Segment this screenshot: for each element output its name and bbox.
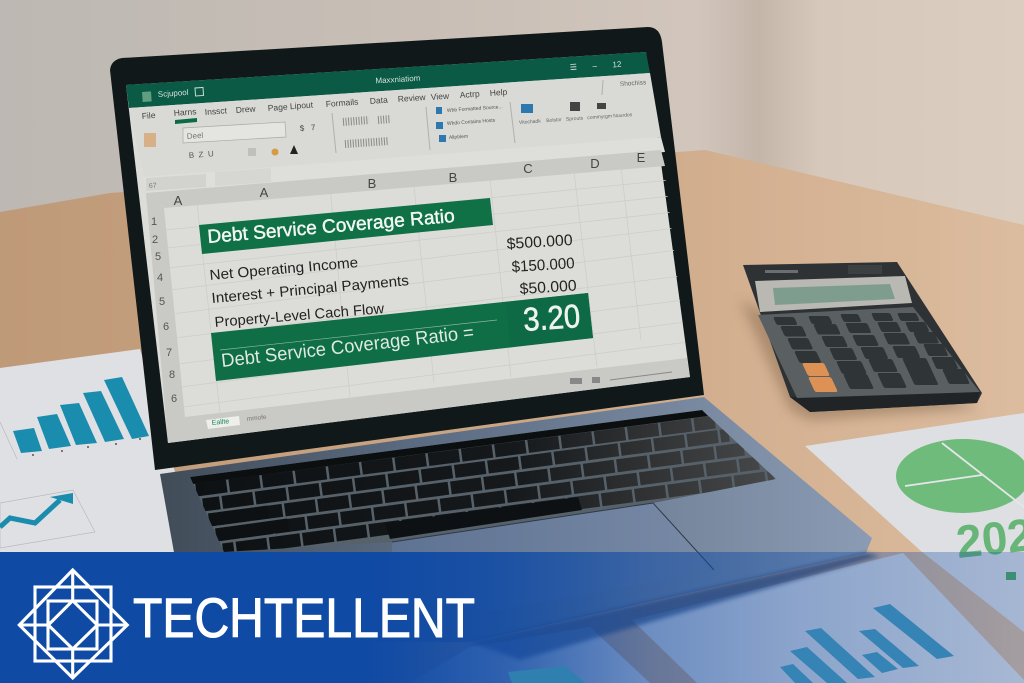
paper: bar chart report on the left: [0, 349, 200, 560]
top strip and solar panel: [765, 265, 882, 274]
result value: 3.20: [522, 297, 581, 338]
ribbon tabs: View: [430, 91, 450, 102]
long modifier keys: [209, 512, 288, 535]
row numbers: [151, 216, 177, 405]
sheet tabs: mmofe: [246, 414, 267, 423]
result value cell: [506, 293, 593, 347]
trend arrow chart: [0, 490, 95, 548]
ribbon style labels: Wbdo Contains Hosts: [447, 118, 496, 127]
column headers band: B: [368, 176, 376, 191]
column headers band: C: [523, 161, 533, 176]
ribbon tabs: Harns: [173, 106, 197, 118]
logo icon: [19, 570, 127, 678]
row labels: Net Operating Income: [209, 255, 359, 284]
row values: $150.000: [511, 255, 575, 276]
paper: small report under banner: [410, 627, 650, 683]
paper: pie chart report on the right: [805, 413, 1024, 632]
column headers band: E: [637, 150, 646, 165]
row labels: [209, 255, 410, 331]
desk shadow under laptop: [470, 553, 880, 660]
bar chart: [13, 377, 149, 453]
space bar: [385, 497, 582, 539]
laptop: [110, 27, 880, 660]
row numbers: 6: [171, 393, 177, 405]
ribbon tabs: Actrp: [459, 88, 480, 100]
font style buttons: B Z U: [189, 149, 214, 160]
formula bar: [144, 137, 665, 193]
ribbon tabs: Help: [489, 87, 508, 98]
active tab underline: [175, 118, 197, 124]
front lip: [790, 391, 980, 412]
share button: Shochiss: [620, 79, 647, 88]
trackpad edge: [392, 503, 714, 570]
row numbers: 6: [163, 321, 169, 333]
font name: Deel: [187, 131, 204, 141]
ribbon: [129, 73, 661, 177]
calculator: [740, 262, 982, 420]
formula buttons: [215, 168, 271, 186]
body: [743, 262, 982, 412]
banner overlay: [0, 552, 1024, 683]
ribbon tabs: Formails: [325, 97, 359, 109]
display: [773, 284, 895, 305]
row numbers: 5: [155, 251, 161, 263]
alignment lines: [343, 119, 391, 144]
fill colour icon: [272, 148, 278, 156]
row values: [506, 232, 578, 298]
save icon: [142, 91, 152, 102]
small legend square: [1006, 572, 1016, 580]
column headers band: A: [260, 185, 269, 200]
column headers band: D: [590, 156, 600, 171]
document title: Maxxniatiom: [375, 74, 421, 85]
ribbon right labels: Vitochadk Bolstor Sprouts commyrgm Nuurdos: [519, 112, 633, 126]
sheet tabs: Eallte: [211, 418, 230, 427]
window controls: ☰ – 12: [570, 60, 622, 72]
ribbon dark icons: [570, 102, 606, 111]
row values: $500.000: [506, 232, 574, 253]
ribbon tabs: File: [141, 110, 156, 121]
ribbon style labels: [447, 104, 503, 141]
row numbers: 2: [152, 234, 158, 246]
status bar controls: [570, 372, 672, 384]
display surround: [755, 276, 912, 312]
number format: $ 7: [300, 123, 316, 133]
screen: [126, 52, 690, 443]
ribbon dividers: [332, 80, 603, 153]
title bar: [126, 52, 650, 108]
row labels: Interest + Principal Payments: [211, 273, 410, 307]
laptop lid: [110, 27, 704, 470]
key panel: [758, 307, 980, 398]
ribbon tabs: Drew: [235, 103, 257, 115]
row numbers: 7: [166, 347, 172, 359]
row numbers: 5: [159, 296, 165, 308]
ribbon blue icons: [436, 104, 533, 142]
font box: [183, 122, 286, 143]
ribbon style labels: Allpblem: [449, 134, 468, 141]
column headers band: B: [449, 170, 457, 185]
ribbon tabs: [141, 87, 508, 121]
paper: bar chart report under banner: [632, 553, 1024, 683]
bar on small lower paper: [508, 666, 585, 683]
result label: Debt Service Coverage Ratio =: [220, 322, 475, 372]
row number gutter: [146, 193, 690, 443]
result band: [211, 293, 593, 381]
bar chart on lower paper: [780, 604, 954, 683]
keyboard: [190, 410, 776, 552]
trackpad: [392, 503, 714, 610]
ribbon tabs: Review: [397, 92, 427, 104]
cell ref: 67: [149, 182, 157, 190]
bar chart axis marks: [32, 438, 141, 456]
sheet title band: [199, 198, 493, 254]
background: wooden desk: [0, 150, 1024, 683]
pie chart: [896, 439, 1024, 513]
shadow: [740, 300, 980, 420]
background: wall: [0, 0, 1024, 240]
row labels: Property-Level Cach Flow: [214, 301, 385, 331]
name box: [146, 174, 206, 191]
brand name: TECHTELLENT: [133, 586, 475, 649]
font colour icon: [290, 145, 298, 154]
ribbon tabs: Inssct: [204, 105, 228, 117]
ribbon style labels: Wbb Formatted Source...: [447, 104, 503, 114]
laptop base: [160, 397, 872, 642]
column headers band: A: [174, 193, 183, 208]
orange keys: [802, 363, 838, 392]
sheet tabs: [206, 414, 267, 429]
keys: [773, 313, 970, 389]
column headers band: [146, 150, 665, 208]
row numbers: 4: [157, 272, 163, 284]
ribbon tabs: Data: [369, 95, 388, 106]
border icon: [248, 148, 256, 156]
row numbers: 8: [169, 369, 175, 381]
ribbon tabs: Page Lipout: [267, 99, 314, 113]
app name: Scjupool: [158, 88, 189, 99]
undo icon: [195, 87, 204, 96]
row numbers: 1: [151, 216, 157, 228]
row values: $50.000: [519, 278, 578, 298]
clipboard icon: [144, 133, 156, 147]
grid lines: [165, 158, 688, 413]
heading: Debt Service Coverage Ratio: [207, 206, 456, 248]
